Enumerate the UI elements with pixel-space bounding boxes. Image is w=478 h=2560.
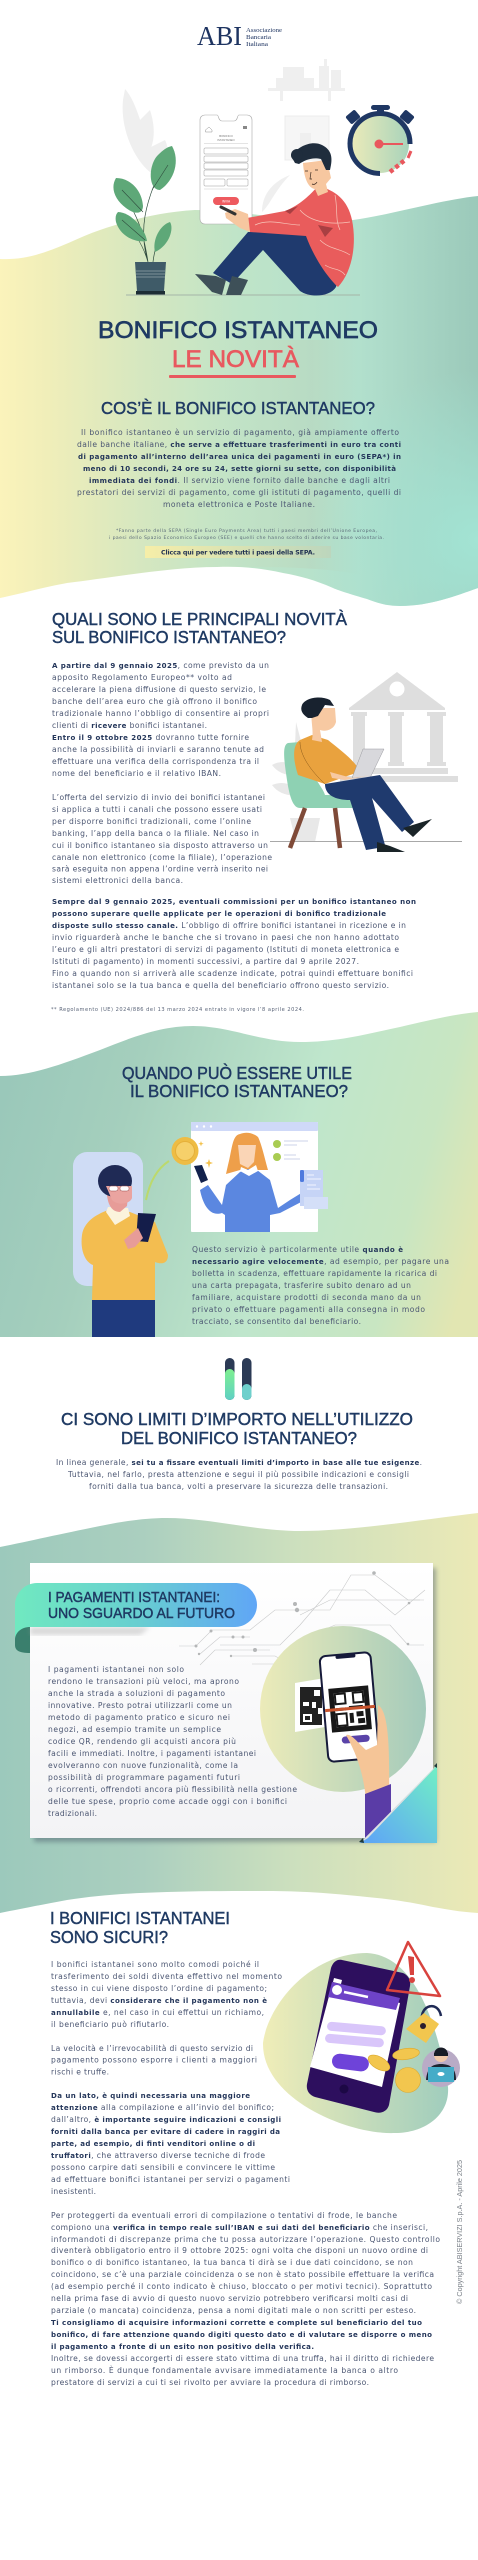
text block: possono carpire dati sensibili e convincere le vittime xyxy=(51,2163,275,2172)
text block: stesso in cui viene disposto l’ordine di pagamento; xyxy=(51,1984,267,1993)
smartphone xyxy=(307,1960,410,2113)
wireframe phone xyxy=(200,115,252,224)
heading xyxy=(50,1908,230,1947)
shoes xyxy=(377,819,432,852)
text block: effettuare una verifica della corrispondenza tra il xyxy=(52,757,259,766)
text block: sarà eseguita non appena l’ordine verrà inserito nei xyxy=(52,864,268,874)
text block: (ad esempio perché il conto indicato è chiuso, bloccato o per motivi tecnici). Soprattutto xyxy=(51,2282,432,2291)
text block: compiono una verifica in tempo reale sull’IBAN e sui dati del beneficiario che inserisci, xyxy=(51,2223,428,2232)
man: head xyxy=(303,160,331,196)
text block: possono superare quelle applicate per le operazioni di bonifico tradizionale xyxy=(52,909,386,918)
ground line xyxy=(126,294,360,296)
text block: codice QR, rendendo gli acquisti ancora più xyxy=(48,1737,236,1746)
illustration: payment from man to woman xyxy=(73,1122,328,1337)
footnote: i paesi dello Spazio Economico Europeo (SEE) e quelli che hanno scelto di aderire su base volontaria. xyxy=(109,535,384,541)
text block: il pagamento a fronte di un esito non positivo della verifica. xyxy=(51,2342,314,2351)
text block: banking, l’app della banca o la filiale. Nel caso in xyxy=(52,829,259,838)
footnote: ** Regolamento (UE) 2024/886 del 13 marzo 2024 entrato in vigore l’8 aprile 2024. xyxy=(51,1007,304,1013)
faint shelf and frame xyxy=(268,59,345,160)
text block xyxy=(56,1458,422,1491)
sleeve xyxy=(365,1784,391,1839)
text block: banche dell’area euro che già offrono il bonifico xyxy=(52,697,257,706)
text block: si applica a tutti i canali che possono essere usati xyxy=(52,805,262,814)
text block: parziale (o mancata) coincidenza, pensa a nomi digitati male o non scritti per esteso. xyxy=(51,2306,416,2315)
trousers xyxy=(325,775,414,850)
armchair xyxy=(284,742,354,808)
coin xyxy=(172,1137,198,1165)
text block: nella prima fase di avvio di questo nuovo servizio potrebbero verificarsi molti casi di xyxy=(51,2294,408,2303)
text block: rischi e truffe. xyxy=(51,2068,109,2076)
heading xyxy=(61,1409,413,1448)
text block: bonifico o di bonifico istantaneo, la tua banca ti dirà se i due dati coincidono, se non xyxy=(51,2258,413,2267)
illustration: man sitting with smartphone xyxy=(113,59,415,296)
text block: Entro il 9 ottobre 2025 dovranno tutte fornire xyxy=(52,733,249,742)
text block: parte, ad esempio, di finti venditori online o di xyxy=(51,2139,255,2148)
woman xyxy=(226,1133,268,1174)
wireframe phone: BONIFICO xyxy=(219,134,234,138)
text block: un rimborso. È dunque fondamentale avvisare immediatamente la banca o altro xyxy=(51,2366,398,2375)
text block: accelerare la piena diffusione di questo servizio, le xyxy=(52,685,266,694)
text block: bolletta in scadenza, effettuare rapidamente la ricarica di xyxy=(192,1269,437,1278)
text block: Istituti di pagamento) in momenti successivi, a partire dal 9 aprile 2027. xyxy=(52,957,359,966)
text block: metodo di pagamento pratico e sicuro nei xyxy=(48,1713,230,1722)
printed QR xyxy=(295,1678,325,1732)
text block: delle tue spese, proprio come accade oggi con i bonifici xyxy=(48,1797,287,1806)
man: sweater xyxy=(247,186,354,287)
heading: DEL BONIFICO ISTANTANEO? xyxy=(121,1428,357,1448)
ribbon: I PAGAMENTI ISTANTANEI: xyxy=(48,1590,220,1606)
section: quando può essere utile xyxy=(73,1062,449,1337)
title: LE NOVITÀ xyxy=(172,346,300,373)
plant xyxy=(113,146,176,295)
text block: tracciato, se consentito dal beneficiario. xyxy=(192,1317,361,1326)
link button: Clicca qui per vedere tutti i paesi della SEPA. xyxy=(161,550,315,556)
text block: familiare, acquistare prodotti di seconda mano da un xyxy=(192,1293,421,1302)
text block: anche la strada a soluzioni di pagamento xyxy=(48,1689,225,1698)
text block: In linea generale, sei tu a fissare eventuali limiti d’importo in base alle tue esigenze. xyxy=(56,1458,422,1467)
illustration: QR code scan xyxy=(260,1626,426,1839)
blue panel xyxy=(73,1152,143,1286)
text block: apposito Regolamento Europeo** volto ad xyxy=(52,673,232,682)
fraudster xyxy=(422,2048,460,2087)
document xyxy=(300,1170,323,1206)
background wave: futuro xyxy=(0,1513,478,1913)
section: limiti d'importo xyxy=(56,1358,422,1491)
text block: Ti consigliamo di acquisire informazioni corrette e complete sul beneficiario del tuo xyxy=(51,2318,422,2327)
warning triangle xyxy=(387,1942,440,1996)
title: BONIFICO ISTANTANEO xyxy=(98,317,378,344)
logo: ABI: Associazione xyxy=(246,27,282,34)
text block: A partire dal 9 gennaio 2025, come previsto da un xyxy=(52,661,269,670)
heading: COS’È IL BONIFICO ISTANTANEO? xyxy=(101,398,375,418)
faint plant and pot xyxy=(272,722,320,842)
text block: invio riguarderà anche le banche che si trovano in paesi che non hanno adottato xyxy=(52,933,399,942)
bank xyxy=(340,672,458,782)
wireframe phone: INVIA xyxy=(222,200,231,204)
head xyxy=(311,708,336,742)
text block: Fino a quando non si arriverà alle scadenze indicate, potrai quindi effettuare bonifici xyxy=(52,969,413,978)
heading xyxy=(122,1062,352,1101)
section: cos'è il bonifico istantaneo xyxy=(77,398,401,558)
ribbon xyxy=(15,1583,257,1653)
text block: I pagamenti istantanei non solo xyxy=(48,1665,184,1674)
text block: una carta prepagata, trasferire subito denaro ad un xyxy=(192,1281,411,1290)
text block: canale non elettronico (come la filiale), l’operazione xyxy=(52,853,272,862)
text block: facili e immediati. Inoltre, i pagamenti istantanei xyxy=(48,1749,256,1758)
text block: trasferimento dei soldi diventa effettivo nel momento xyxy=(51,1972,282,1981)
copyright: © Copyright ABISERVIZI S.p.A. - Aprile 2025 xyxy=(456,2160,464,2304)
circuit lines xyxy=(179,1575,425,1670)
text block: nome del beneficiario e il relativo IBAN. xyxy=(52,769,221,778)
text block: tuttavia, devi considerare che il pagamento non è xyxy=(51,1996,267,2005)
phone xyxy=(319,1652,379,1762)
text block: necessario agire velocemente, ad esempio, per pagare una xyxy=(192,1257,449,1266)
text block: sistemi elettronici della banca. xyxy=(52,876,183,885)
text block: Da un lato, è quindi necessaria una maggiore xyxy=(51,2091,250,2100)
text block: informandoti di discrepanze prima che tu possa autorizzare l’operazione. Questo controllo xyxy=(51,2235,440,2244)
footnote xyxy=(109,528,384,541)
icon: toggles xyxy=(225,1358,252,1400)
text block: o ricorrenti, offrendoti ancora più flessibilità nella gestione xyxy=(48,1785,297,1794)
heading xyxy=(52,609,347,647)
heading: IL BONIFICO ISTANTANEO? xyxy=(130,1081,348,1101)
text block: prestatori dei servizi di pagamento, come gli istituti di pagamento, quelli di xyxy=(77,488,401,497)
text block: Inoltre, se dovessi accorgerti di essere stato vittima di una truffa, hai il diritto di richiedere xyxy=(51,2354,434,2363)
logo: ABI xyxy=(197,21,282,51)
text block: dall’altro, è importante seguire indicazioni e consigli xyxy=(51,2115,281,2124)
text block: La velocità e l’irrevocabilità di questo servizio di xyxy=(51,2044,253,2053)
background wave: hero xyxy=(0,196,478,606)
text block: Sempre dal 9 gennaio 2025, eventuali commissioni per un bonifico istantaneo non xyxy=(52,897,416,906)
text block: forniti dalla tua banca, volti a preservare la sicurezza delle transazioni. xyxy=(89,1482,388,1491)
heading: SUL BONIFICO ISTANTANEO? xyxy=(52,627,286,647)
text block: tradizionali. xyxy=(48,1809,97,1818)
browser window xyxy=(191,1122,328,1232)
text block: clienti di ricevere bonifici istantanei. xyxy=(52,721,207,730)
text block: meno di 10 secondi, 24 ore su 24, sette giorni su sette, con disponibilità xyxy=(83,464,396,473)
text block: per disporre bonifici tradizionali, come l’online xyxy=(52,817,251,826)
text block: bonifico, di fare attenzione quando digiti questo dato e di valutare se disporre o meno xyxy=(51,2330,432,2339)
text block: dalle banche italiane, che serve a effettuare trasferimenti in euro tra conti xyxy=(77,440,401,449)
text block: coincidono, se c’è una parziale coincidenza o se non è stato possibile effettuare la verifica xyxy=(51,2270,434,2279)
ribbon: UNO SGUARDO AL FUTURO xyxy=(48,1606,235,1622)
logo: ABI: Bancaria xyxy=(246,34,271,41)
text block: attenzione alla compilazione e all’invio del bonifico; xyxy=(51,2103,274,2112)
illustration: phone, warning and fraudster xyxy=(263,1942,460,2133)
illustration: man on armchair with bank xyxy=(270,672,462,852)
text block: truffatori, che attraverso diverse tecniche di frode xyxy=(51,2151,265,2160)
shirt xyxy=(294,735,360,784)
text block: evolveranno con nuove funzionalità, come la xyxy=(48,1761,238,1770)
text block: Questo servizio è particolarmente utile quando è xyxy=(192,1245,403,1254)
text block: innovative. Presto potrai utilizzarli come un xyxy=(48,1701,232,1710)
text block: I bonifici istantanei sono molto comodi poiché il xyxy=(51,1960,259,1969)
text block xyxy=(52,661,416,990)
text block xyxy=(192,1245,449,1326)
text block xyxy=(48,1665,297,1818)
text block: l’euro e gli altri prestatori di servizi di pagamento (Istituti di moneta elettronica e xyxy=(52,945,399,954)
man: shoes xyxy=(195,274,248,295)
man with phone xyxy=(82,1165,168,1337)
title xyxy=(98,317,378,378)
logo: ABI: Italiana xyxy=(246,41,268,48)
panel: i pagamenti istantanei xyxy=(15,1563,437,1843)
link button xyxy=(145,546,331,558)
text block: inesistenti. xyxy=(51,2187,96,2196)
text block: diventerà obbligatorio entro il 9 ottobre 2025: ogni volta che disponi un nuovo ordine di xyxy=(51,2246,428,2255)
text block: privato o effettuare pagamenti alla consegna in modo xyxy=(192,1305,425,1314)
section: principali novità xyxy=(51,609,462,1013)
page corner xyxy=(359,1763,437,1843)
heading: QUALI SONO LE PRINCIPALI NOVITÀ xyxy=(52,609,347,629)
text block xyxy=(77,428,401,509)
text block: anche la possibilità di inviarli e saranno tenute ad xyxy=(52,745,264,754)
blob xyxy=(263,1953,448,2133)
footnote: *Fanno parte della SEPA (Single Euro Payments Area) tutti i paesi membri dell’Unione Europea, xyxy=(116,528,378,534)
text block: istantanei solo se la tua banca e quella del beneficiario offrono questo servizio. xyxy=(52,981,389,990)
card xyxy=(30,1563,436,1842)
text block: pagamento possono esporre i clienti a maggiori xyxy=(51,2056,257,2064)
text block: annullabile e, nel caso in cui effettui un richiamo, xyxy=(51,2008,264,2017)
text block: forniti dalla banca per evitare di cadere in raggiri da xyxy=(51,2127,280,2136)
text block: immediata dei fondi. Il servizio viene fornito dalle banche e dagli altri xyxy=(89,476,390,485)
text block: il beneficiario può rifiutarlo. xyxy=(51,2020,169,2029)
background wave: quando xyxy=(0,1012,478,1337)
text block: cui il bonifico istantaneo sia disposto attraverso un xyxy=(52,841,268,850)
heading: I BONIFICI ISTANTANEI xyxy=(50,1908,230,1928)
text block: Per proteggerti da eventuali errori di compilazione o tentativi di frode, le banche xyxy=(51,2211,397,2220)
text block: ad effettuare bonifici istantanei per servizi o pagamenti xyxy=(51,2175,290,2184)
heading: QUANDO PUÒ ESSERE UTILE xyxy=(122,1062,352,1083)
text block: tradizionale hanno l’obbligo di consentire ai propri xyxy=(52,709,269,718)
text block: rendono le transazioni più veloci, ma aprono xyxy=(48,1677,239,1686)
text block: prestatore di servizi a cui ti sei rivolto per avviare la procedura di rimborso. xyxy=(51,2378,369,2387)
text block: negozi, ad esempio tramite un semplice xyxy=(48,1725,221,1734)
text block xyxy=(51,1960,440,2387)
man: pants xyxy=(213,232,340,296)
laptop xyxy=(352,749,384,778)
stopwatch xyxy=(345,105,415,174)
text block: Il bonifico istantaneo è un servizio di pagamento, già ampiamente offerto xyxy=(81,428,399,437)
faint leaves xyxy=(123,89,290,212)
man: arm and hand xyxy=(225,209,250,232)
text block: Tuttavia, nel farlo, presta attenzione e segui il più possibile indicazioni e consigli xyxy=(67,1470,409,1479)
heading: SONO SICURI? xyxy=(50,1927,168,1947)
text block: L’offerta del servizio di invio dei bonifici istantanei xyxy=(52,793,265,802)
text block: di pagamento all’interno dell’area unica dei pagamenti in euro (SEPA*) in xyxy=(78,452,401,461)
text block: moneta elettronica e Poste Italiane. xyxy=(163,500,315,509)
logo: ABI: ABI xyxy=(197,21,242,51)
hand xyxy=(346,1705,389,1800)
wireframe phone: ISTANTANEO xyxy=(217,138,236,142)
text block: possibilità di programmare pagamenti futuri xyxy=(48,1773,240,1782)
section: sono sicuri xyxy=(50,1908,460,2387)
arrow xyxy=(146,1161,169,1200)
padlock xyxy=(406,2006,441,2043)
heading: CI SONO LIMITI D’IMPORTO NELL’UTILIZZO xyxy=(61,1409,413,1429)
coins xyxy=(366,2047,420,2092)
text block: disposte sullo stesso canale. L’obbligo di offrire bonifici istantanei in ricezione e in xyxy=(52,921,406,930)
